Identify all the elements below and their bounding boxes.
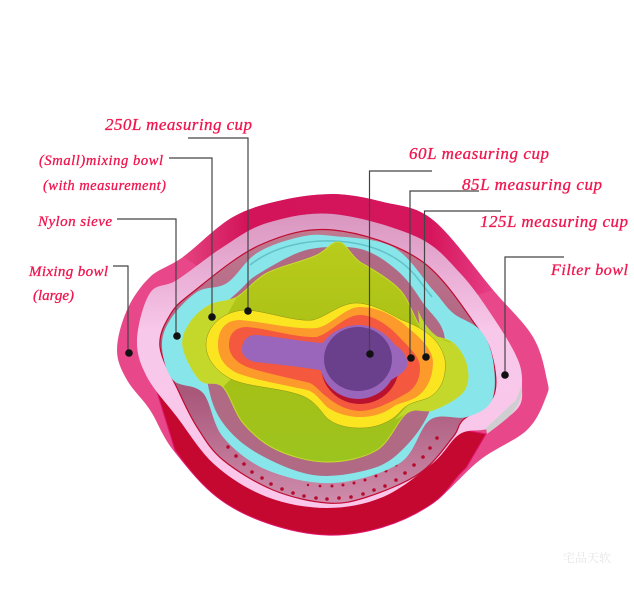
label: 60L measuring cup: 60L measuring cup	[409, 144, 549, 163]
small mixing bowl	[183, 242, 468, 462]
label: large: (large)	[33, 288, 74, 304]
label: 125L measuring cup: 125L measuring cup	[480, 212, 628, 231]
label: 250L measuring cup: 250L measuring cup	[105, 115, 252, 134]
125L measuring cup	[218, 307, 433, 417]
250L measuring cup	[206, 303, 445, 428]
label: filter bowl: Filter bowl	[550, 262, 629, 279]
85L measuring cup	[229, 315, 420, 411]
large mixing bowl	[117, 194, 549, 535]
label: small mixing bowl line 1: (Small)mixing bowl	[39, 153, 163, 169]
nylon sieve	[162, 235, 495, 483]
image: nested rainbow bowl set	[117, 194, 549, 535]
label: nylon sieve: Nylon sieve	[37, 214, 112, 230]
leader lines	[113, 138, 564, 375]
label: mixing bowl: Mixing bowl	[28, 264, 108, 280]
filter holes	[226, 436, 439, 501]
filter bowl	[137, 213, 522, 508]
label: 85L measuring cup: 85L measuring cup	[462, 175, 602, 194]
label: small mixing bowl line 2: (with measurement)	[43, 178, 166, 194]
leader dots	[125, 307, 509, 379]
watermark: 宅品天软	[563, 551, 611, 565]
60L measuring cup	[242, 325, 407, 399]
